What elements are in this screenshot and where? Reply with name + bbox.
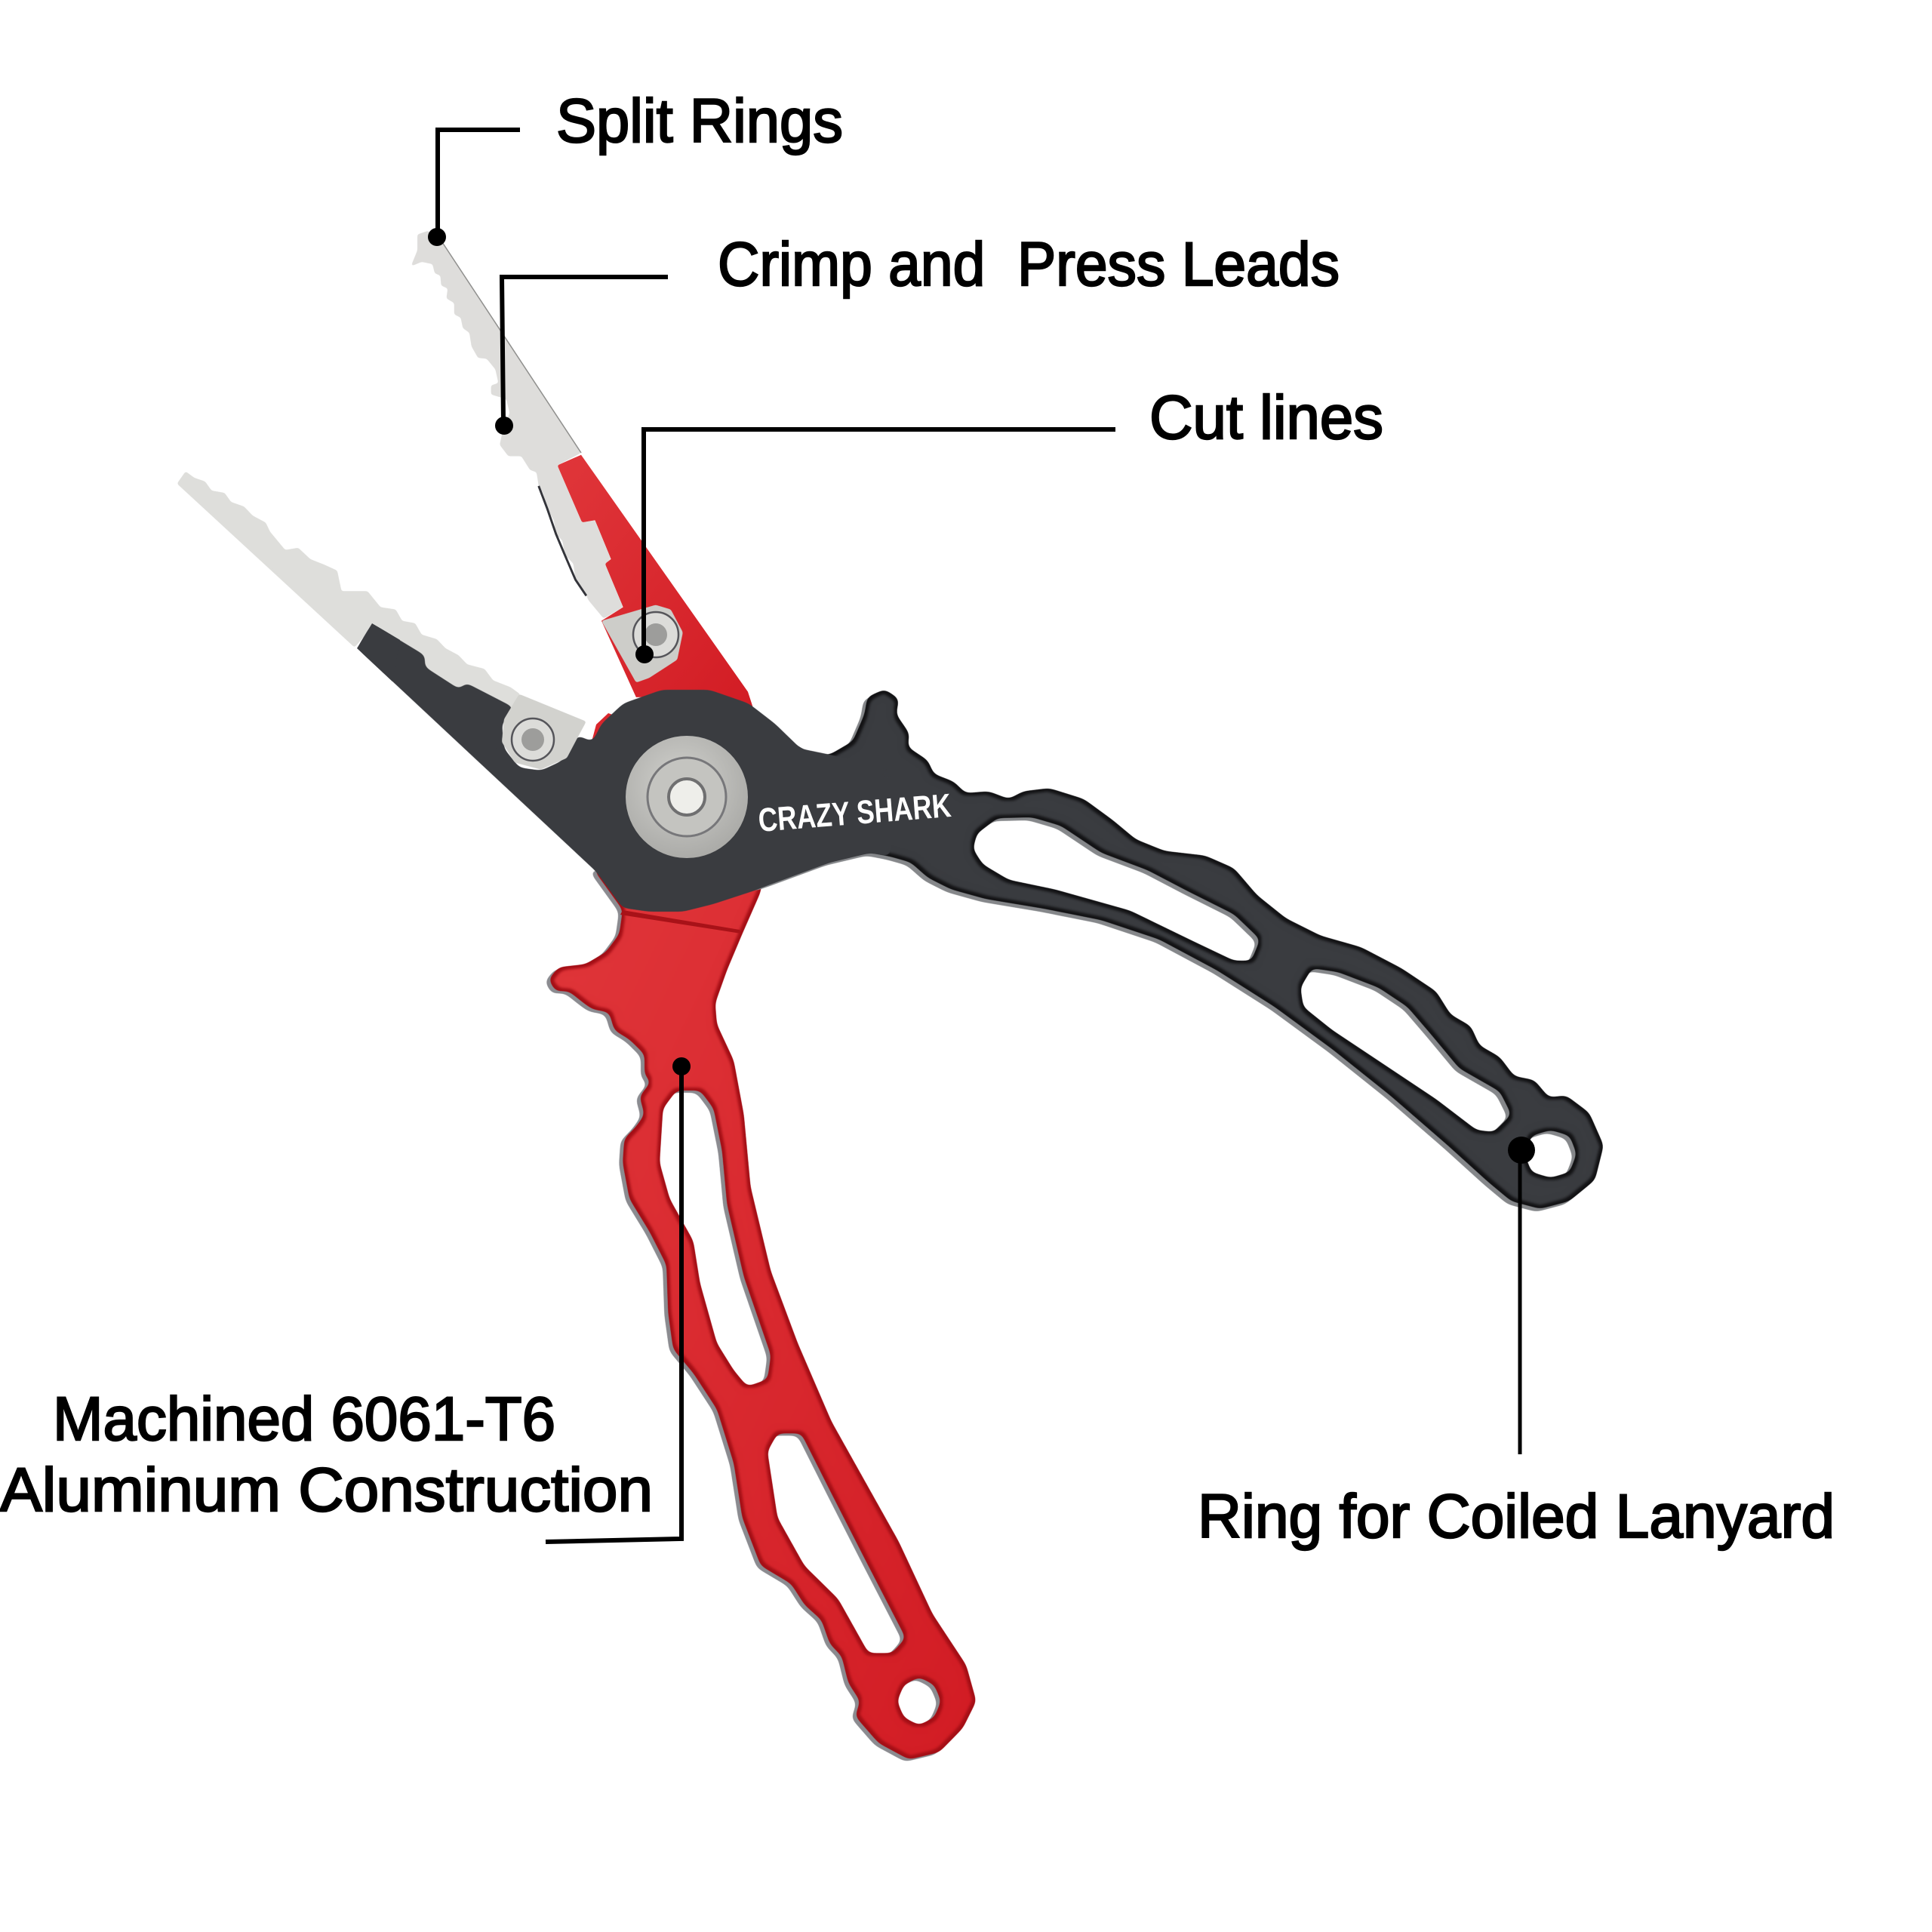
black handle edge (755, 689, 1604, 1209)
illustration: fishing pliers (177, 231, 1604, 1761)
upper jaw dark tooth edge (539, 486, 586, 595)
red handle edge (549, 868, 977, 1759)
label: Split Rings: Split Rings (556, 87, 843, 155)
brand text: CRAZY SHARK (757, 787, 952, 839)
red handle face (549, 868, 977, 1759)
upper jaw red body (557, 455, 753, 708)
label: Aluminum Construction: Aluminum Construction (0, 1456, 653, 1524)
lower screw (512, 718, 554, 761)
leader: Crimp and Press Leads (495, 277, 668, 435)
lower jaw steel insert (177, 472, 520, 710)
lower handle (red) (545, 868, 977, 1761)
lower jaw sharp tip corner (357, 623, 400, 681)
label: Ring for Coiled Lanyard: Ring for Coiled Lanyard (1198, 1482, 1835, 1551)
black handle face (755, 689, 1604, 1209)
lower jaw steel plate (502, 694, 586, 770)
upper jaw (411, 231, 753, 708)
upper screw (633, 612, 678, 657)
pivot washer (626, 736, 748, 858)
label: Crimp and Press Leads: Crimp and Press Leads (718, 230, 1340, 299)
upper jaw steel plate (601, 605, 683, 682)
black handle (751, 689, 1604, 1212)
black handle bevel shadow (751, 692, 1600, 1212)
label: Cut lines: Cut lines (1149, 383, 1383, 452)
leader: Machined Aluminum (546, 1057, 691, 1542)
label: Machined 6061-T6: Machined 6061-T6 (53, 1385, 555, 1454)
red sliver behind pivot (590, 713, 619, 747)
pivot body (black) (357, 623, 891, 912)
red handle seam (620, 910, 741, 934)
red handle bevel shadow (545, 870, 973, 1761)
upper jaw right edge line (442, 242, 581, 453)
leader: Ring for Coiled Lanyard (1508, 1137, 1535, 1454)
upper jaw steel insert (411, 231, 623, 619)
leader: Split Rings (428, 130, 520, 246)
leader: Cut lines (635, 429, 1115, 663)
